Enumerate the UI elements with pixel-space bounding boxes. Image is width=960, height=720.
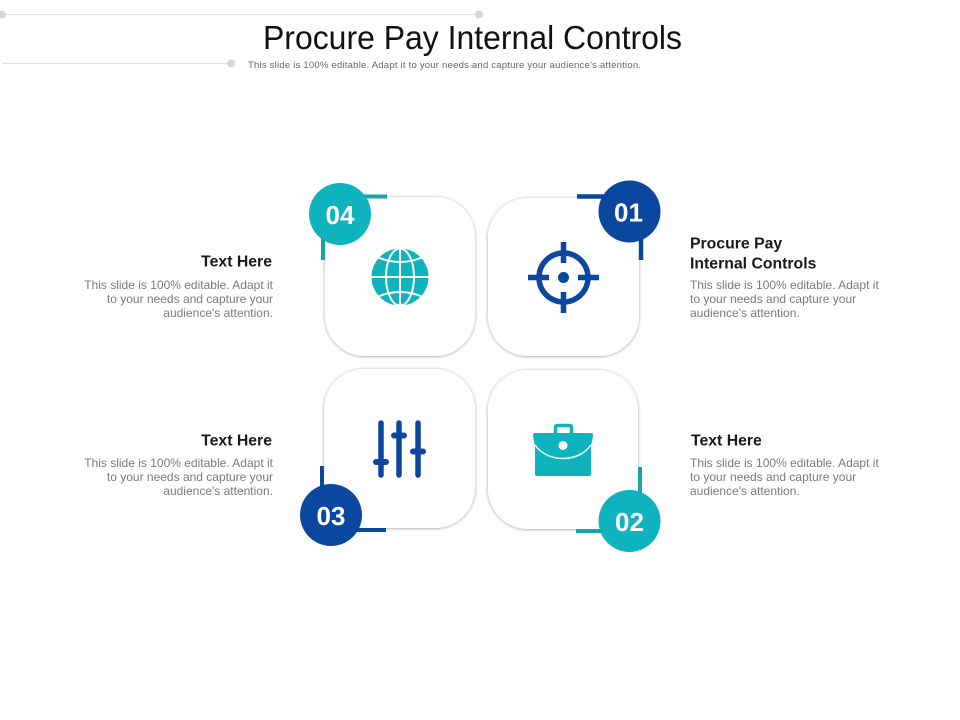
icon: sliders [376, 423, 423, 475]
body: This slide is 100% editable. Adapt it [84, 278, 274, 292]
badge 01: 01 [614, 198, 643, 228]
body: This slide is 100% editable. Adapt it [84, 456, 274, 470]
heading: Text Here [201, 254, 272, 270]
body: This slide is 100% editable. Adapt it [690, 278, 879, 292]
text block: 01 top right [690, 236, 879, 320]
body [690, 456, 879, 498]
panel: 03 card (bottom left) [300, 369, 475, 546]
body: to your needs and capture your [107, 292, 273, 306]
accent lines 03 [322, 466, 386, 530]
card 04 background [325, 197, 475, 356]
panel: 02 card (bottom right) [488, 370, 660, 552]
text block: 04 top left [84, 254, 274, 320]
panel: 01 card (top right) [488, 180, 660, 356]
body: audience's attention. [163, 484, 273, 498]
body: audience's attention. [690, 306, 800, 320]
icon: globe [371, 248, 429, 306]
body: This slide is 100% editable. Adapt it [690, 456, 879, 470]
badge 01 [598, 180, 660, 242]
panel: 04 card (top left) [309, 183, 475, 356]
title: Procure Pay Internal Controls [263, 19, 682, 56]
heading [690, 236, 817, 272]
accent lines 04 [323, 196, 387, 260]
body [84, 456, 274, 498]
badge 02 [598, 490, 660, 552]
icon: target crosshair [528, 242, 599, 313]
body: to your needs and capture your [107, 470, 273, 484]
body: to your needs and capture your [690, 470, 856, 484]
badge 03 [300, 484, 362, 546]
heading: Procure Pay [690, 236, 782, 252]
decorative header lines with dots [0, 10, 483, 68]
accent lines 01 [577, 196, 641, 260]
card 03 background [324, 369, 475, 528]
heading: Internal Controls [690, 256, 817, 272]
badge 02: 02 [615, 507, 644, 537]
body [84, 278, 274, 320]
text block: 02 bottom right [690, 432, 879, 498]
body: audience's attention. [690, 484, 800, 498]
heading: Text Here [691, 432, 762, 450]
badge 04: 04 [326, 200, 355, 230]
card 01 background [488, 198, 639, 356]
heading: Text Here [201, 432, 272, 450]
icon: briefcase [533, 426, 593, 476]
body: to your needs and capture your [690, 292, 856, 306]
card 02 background [488, 370, 638, 529]
accent lines 02 [576, 467, 640, 531]
body [690, 278, 879, 320]
badge 04 [309, 183, 371, 245]
subtitle: This slide is 100% editable. Adapt it to your needs and capture your audience's attention. [248, 60, 641, 71]
badge 03: 03 [317, 501, 345, 531]
body: audience's attention. [163, 306, 273, 320]
text block: 03 bottom left [84, 432, 274, 498]
